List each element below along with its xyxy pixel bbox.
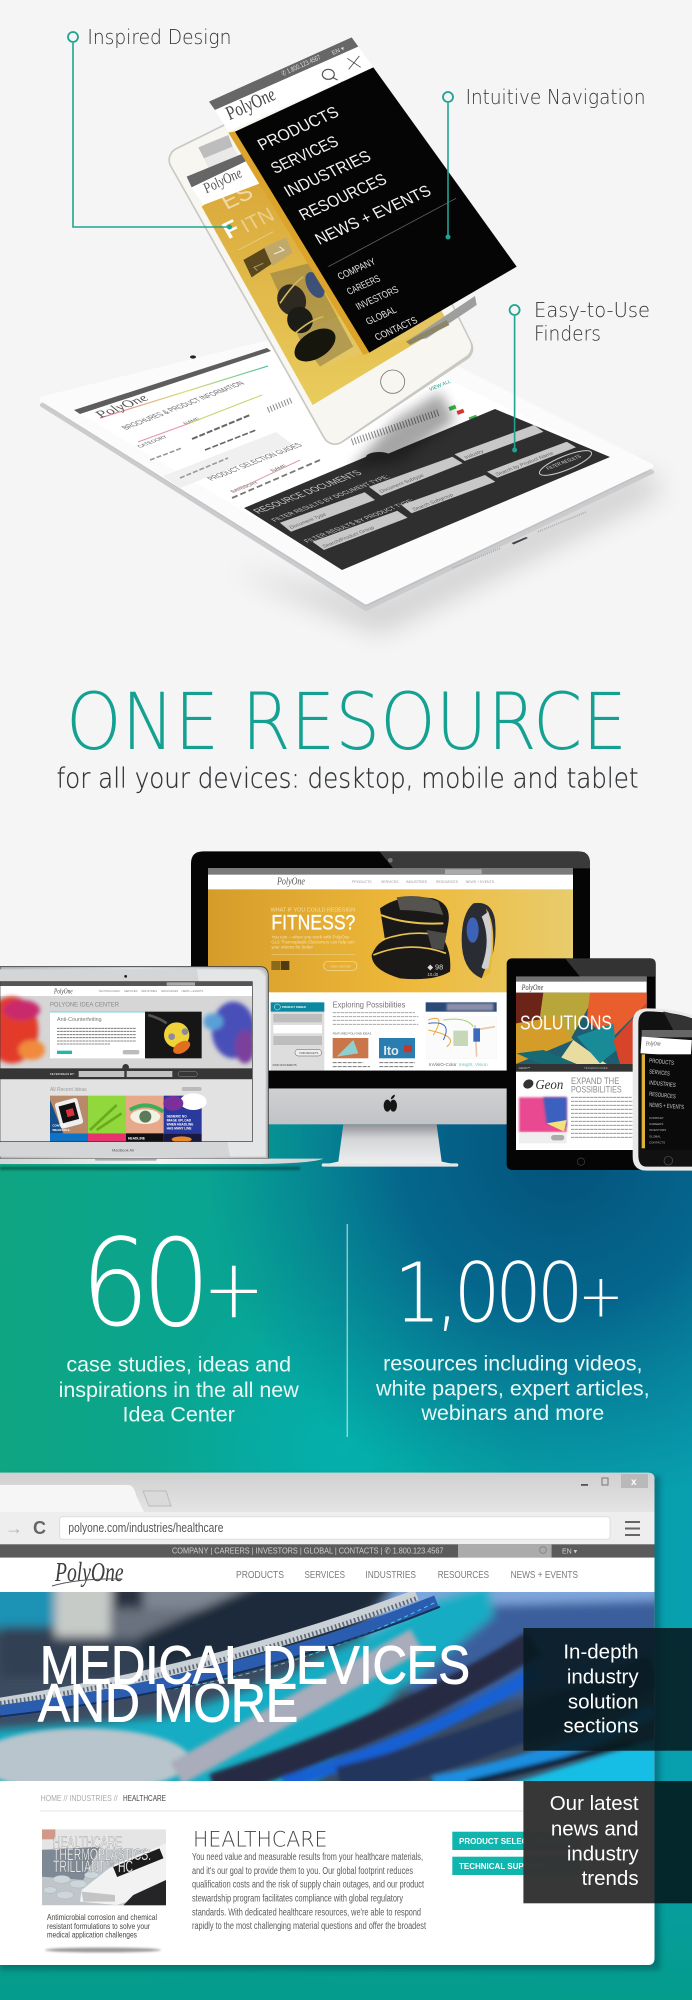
help buttons: PRODUCT SELECTION HELP [459, 1837, 571, 1846]
menu items [649, 1058, 684, 1111]
tablet page headings: BROCHURES & PRODUCT INFORMATION [119, 380, 247, 431]
filter results button: FILTER RESULTS [546, 454, 583, 471]
window controls [581, 1474, 648, 1488]
menu items: PRODUCTS [649, 1058, 674, 1067]
idea tiles: HAS MANY LINE [167, 1127, 192, 1131]
black menu [642, 1054, 692, 1150]
stand [322, 1124, 458, 1165]
screen nav [98, 990, 204, 992]
product image: wristband [462, 903, 496, 978]
callout: Intuitive Navigation [443, 85, 646, 240]
expand heading [571, 1076, 622, 1095]
help buttons: → [566, 1861, 576, 1872]
ghost letters: ES [216, 178, 257, 214]
tablet logo: PolyOne [90, 393, 154, 420]
panel headings: RESOURCE DOCUMENTS [251, 469, 365, 516]
browser tab [0, 1485, 144, 1512]
ideas hero [0, 996, 252, 1068]
expand heading: EXPAND THE [571, 1076, 619, 1086]
hero image [0, 1592, 654, 1781]
callout box: news and trends: trends [582, 1867, 639, 1890]
tablet page headings: NAME [183, 417, 203, 426]
secondary menu items: INVESTORS [354, 285, 401, 313]
blurred foreground [0, 1728, 190, 1792]
address bar [60, 1517, 610, 1539]
language switch: EN ▾ [331, 46, 346, 57]
site nav bar [0, 1558, 654, 1592]
top bar [642, 1030, 692, 1037]
dropdown labels [289, 449, 555, 549]
callout box: industry sections [523, 1628, 692, 1751]
menu items: SERVICES [649, 1069, 670, 1077]
idea tiles: HEADLINE [128, 1137, 146, 1141]
secondary menu items: COMPANY [336, 257, 378, 283]
reflection [565, 958, 656, 977]
site navigation [352, 880, 495, 884]
tablet shadow [230, 470, 665, 632]
exploring possibilities: Exploring Possibilities [333, 1000, 405, 1009]
stat text: resources: white papers, expert articles, [375, 1377, 650, 1401]
healthcare paragraph: standards. With dedicated healthcare resources, we're able to respond [192, 1907, 421, 1918]
stat text: resources [375, 1352, 650, 1425]
screen nav: INDUSTRIES [141, 989, 157, 993]
idea tiles [50, 1093, 207, 1142]
home button [664, 1156, 673, 1165]
tablet screen [74, 326, 610, 570]
dropdown labels: Search Subgroup [412, 493, 455, 512]
callout box: industry sections: In-depth [563, 1640, 639, 1663]
breadcrumb: HOME // INDUSTRIES // [41, 1793, 118, 1803]
screen nav: RESOURCES [161, 989, 178, 993]
product caption [47, 1912, 157, 1940]
product photo title [53, 1834, 151, 1876]
screen nav: TECHNOLOGIES [99, 989, 120, 993]
callout: Inspired Design [68, 25, 232, 230]
model label: MacBook Air [112, 1147, 135, 1152]
smartphone [633, 1008, 692, 1171]
reload icon: C [33, 1518, 46, 1538]
desktop computer [191, 851, 590, 1167]
tablet device: solutions page: TECHNOLOGIES [584, 1066, 608, 1070]
hero heading: MEDICAL DEVICES [40, 1635, 470, 1695]
nav items: SERVICES [304, 1570, 345, 1581]
small menu items: CONTACTS [649, 1140, 665, 1144]
help buttons: → [566, 1836, 576, 1847]
product photo title: HEALTHCARE [53, 1834, 122, 1852]
menu icon [625, 1521, 640, 1536]
banner body [271, 935, 355, 950]
dark filter bar [0, 1068, 252, 1079]
dropdown labels: Search by Product Name [495, 451, 555, 477]
card shadow [45, 1948, 161, 1952]
menu text [220, 46, 456, 343]
screen [516, 977, 647, 1150]
product image: wearable: ◆ 98 [427, 962, 443, 971]
site navigation: RESOURCES [436, 880, 459, 884]
lower ideas [0, 1079, 252, 1080]
site navigation: NEWS + EVENTS [466, 880, 495, 884]
callout: Easy-to-Use Finders: Finders [534, 322, 601, 346]
nav items: PRODUCTS [236, 1570, 284, 1581]
logo: PolyOne [521, 983, 544, 992]
nav items [236, 1570, 578, 1581]
hero heading [38, 1635, 470, 1734]
product image: wearable [372, 896, 450, 979]
tablet table rows [138, 395, 440, 498]
title: ONE RESOURCE [66, 678, 627, 768]
side ad [426, 1002, 497, 1012]
small menu items [649, 1116, 666, 1144]
stat text: resources: webinars and more [420, 1401, 604, 1425]
laptop screen: All Recent Ideas [50, 1087, 87, 1093]
tablet page headings: CATEGORY [230, 481, 261, 494]
page background [0, 0, 692, 1124]
idea tiles: WEARABLE [52, 1128, 70, 1132]
small menu items: COMPANY [649, 1116, 664, 1120]
healthcare paragraph [192, 1852, 426, 1932]
secondary menu items [336, 257, 420, 343]
ribbed tube [0, 1595, 440, 1717]
stat: 1,000+: 1,000 [394, 1247, 578, 1342]
banner heading: WHAT IF YOU COULD REDESIGN [271, 908, 355, 914]
phone ghost pages [198, 135, 233, 158]
stat: 1,000+: + [578, 1262, 623, 1331]
desktop computer: FIND RESULTS [299, 1051, 319, 1055]
desktop computer: VIEW CENTER [330, 964, 352, 968]
primary menu items: SERVICES [268, 133, 342, 177]
browser toolbar [0, 1512, 654, 1544]
tablet page headings: NAME [270, 464, 290, 473]
black lower bezel strip [208, 1071, 573, 1088]
idea center title: POLYONE IDEA CENTER [50, 1002, 119, 1009]
tablet camera [190, 355, 196, 359]
tablet status icons: VIEW ALL [429, 379, 452, 393]
gallery arrows [243, 248, 272, 278]
dropdown labels: Document Type [289, 512, 328, 530]
callout box: news and trends: Our latest [550, 1792, 639, 1815]
banner body: your visions for better [271, 945, 314, 950]
hero banner [208, 889, 573, 992]
finder panel [271, 1012, 324, 1071]
body [507, 958, 656, 1170]
apple logo mark [384, 1095, 397, 1112]
site navigation: PRODUCTS [352, 880, 372, 884]
screen [208, 868, 573, 1071]
tablet header band [74, 348, 271, 414]
featured image [148, 1015, 192, 1057]
search icon [322, 69, 338, 80]
phone screen content [216, 178, 448, 368]
site navigation: SERVICES [381, 880, 399, 884]
menu items: INDUSTRIES [649, 1080, 676, 1089]
healthcare paragraph: and it's our goal to provide them to you. Our global footprint reduces [192, 1866, 413, 1877]
geon logo: Geon [535, 1078, 563, 1093]
panel dropdowns [280, 425, 576, 550]
menu black panel [235, 67, 517, 353]
stat text: case studies: inspirations in the all new [59, 1378, 299, 1402]
healthcare paragraph: qualification costs and the risk of supply chain outages, and our product [192, 1880, 424, 1891]
chin [191, 1088, 590, 1124]
secondary menu items: CAREERS [345, 274, 383, 298]
small menu items: GLOBAL [649, 1134, 661, 1138]
phone number: ✆ 1.800.123.4567 [280, 53, 322, 78]
callout box: news and trends [523, 1781, 692, 1903]
tablet status icons [429, 379, 477, 421]
white band [641, 1037, 692, 1057]
expand heading: POSSIBILITIES [571, 1085, 622, 1095]
menu items: RESOURCES [649, 1092, 676, 1100]
product caption: medical application challenges [47, 1930, 137, 1940]
panel headings: FILTER RESULTS BY PRODUCT TYPE: [301, 498, 417, 544]
paint splash red [0, 997, 45, 1063]
healthcare paragraph: stewardship program facilitates compliance with global regulatory [192, 1894, 403, 1905]
banner buttons [271, 961, 280, 970]
stat text: resources: resources including videos, [383, 1352, 642, 1376]
phone screen [202, 140, 448, 405]
site utility bar [0, 1544, 654, 1558]
product image: wearable: 10.d0 [427, 972, 439, 977]
product photo title: TRILLIANT™ HC [53, 1858, 133, 1876]
tablet page headings [119, 380, 304, 494]
laptop base [0, 1159, 323, 1164]
idea tiles: CONTENT [52, 1124, 67, 1128]
healthcare paragraph: You need value and measurable results from your healthcare materials, [192, 1852, 423, 1863]
small menu items: INVESTORS [649, 1128, 666, 1132]
primary menu items: RESOURCES [296, 171, 390, 224]
phone home button [381, 370, 405, 393]
site logo: PolyOne [276, 876, 305, 888]
tablet device with finder page [42, 310, 665, 632]
help buttons: TECHNICAL SUPPORT [459, 1862, 546, 1871]
geon logo [522, 1078, 563, 1093]
tablet page headings: PRODUCT SELECTION GUIDES [205, 442, 304, 482]
dropdown labels: Industry [464, 449, 486, 460]
callout box: industry sections: solution [568, 1690, 639, 1713]
laptop computer [0, 967, 323, 1170]
browser window [0, 1473, 667, 1970]
browser shadow [0, 1476, 660, 1970]
phone shadow [350, 392, 455, 470]
paint splash blue [203, 1002, 255, 1063]
desktop computer: FITNESS? [271, 911, 355, 934]
bezel [191, 851, 590, 1088]
laptop screen [0, 982, 255, 1142]
idea tiles: WHEN HEADLINE [167, 1123, 193, 1127]
primary menu items: PRODUCTS [254, 103, 342, 154]
product image [270, 263, 353, 368]
solutions heading: SOLUTIONS [520, 1011, 612, 1034]
product caption: Antimicrobial corrosion and chemical [47, 1912, 157, 1922]
hero artwork [516, 993, 647, 1064]
secondary menu items: CONTACTS [373, 315, 420, 343]
window controls: x [631, 1477, 637, 1488]
close icon [347, 56, 361, 69]
idea tiles: IMAGE UPLOAD [167, 1119, 192, 1123]
tablet body [42, 314, 652, 609]
logo: PolyOne [645, 1040, 661, 1047]
help buttons [452, 1832, 580, 1875]
product caption: resistant formulations to solve your [47, 1921, 150, 1931]
menu white band [215, 47, 373, 132]
breadcrumb: HEALTHCARE [123, 1793, 166, 1803]
desktop computer: FIND DOCUMENTS [273, 1063, 297, 1067]
product photo [42, 1829, 166, 1905]
site navigation: INDUSTRIES [406, 880, 428, 884]
menu logo: PolyOne [220, 84, 280, 125]
phone screen content: ITN [237, 203, 278, 238]
callout box: news and trends: news and [551, 1818, 639, 1841]
primary menu items [254, 103, 434, 248]
stat text: case studies [59, 1353, 299, 1427]
utility links: COMPANY | CAREERS | INVESTORS | GLOBAL | CONTACTS | ✆ 1.800.123.4567 [172, 1546, 444, 1556]
lid [0, 967, 268, 1159]
callout: Easy-to-Use Finders: Easy-to-Use [534, 298, 650, 322]
stat: 60+: 60 [81, 1214, 203, 1353]
small menu items: CAREERS [649, 1122, 663, 1126]
dropdown labels: Search/Product Group [322, 525, 376, 549]
stat text: case studies: Idea Center [123, 1403, 235, 1427]
filter results button [537, 446, 594, 480]
screen nav: NEWS + EVENTS [182, 989, 204, 993]
primary menu items: INDUSTRIES [281, 148, 374, 201]
screen logo: PolyOne [53, 987, 73, 995]
browser frame [0, 1473, 654, 1965]
tablet gradient line [100, 366, 268, 418]
desktop computer: PRODUCT FINDER [282, 1005, 306, 1009]
dropdown labels: Document Subtype [379, 473, 426, 494]
featured product card [42, 1829, 166, 1952]
idea tiles: GENERIC NO [167, 1115, 187, 1119]
teal gradient background [0, 1124, 692, 2000]
forward arrow: → [5, 1518, 23, 1538]
healthcare heading: HEALTHCARE [193, 1828, 327, 1852]
desktop computer: Insight, Vision [459, 1062, 488, 1067]
tablet home port and speakers [452, 512, 587, 568]
callout box: industry sections: sections [563, 1715, 639, 1738]
banner body: GLS Thermoplastic Elastomers can help turn [271, 940, 355, 945]
browser window: EN ▾ [562, 1549, 578, 1556]
callout: Inspired Design: Inspired Design [87, 25, 231, 49]
bezel reflection [379, 851, 590, 868]
menu top bar [209, 37, 358, 110]
screen nav: SERVICES [124, 989, 138, 993]
url: polyone.com/industries/healthcare [68, 1520, 223, 1535]
hero word fragment: F [218, 215, 245, 245]
laptop screen: Anti-Counterfeiting [57, 1017, 102, 1023]
laptop screen: FILTER IDEAS BY: [50, 1072, 75, 1076]
callout box: news and trends: industry [567, 1843, 639, 1866]
tablet dark filter panel [244, 409, 610, 570]
rim [633, 1008, 692, 1171]
nav items: RESOURCES [438, 1570, 489, 1581]
idea thumbnails [333, 1038, 368, 1058]
nav items: INDUSTRIES [365, 1570, 416, 1581]
tablet device: solutions page: GEON™ [519, 1066, 530, 1070]
hero heading: AND MORE [38, 1674, 298, 1734]
healthcare paragraph: rapidly to the most challenging material questions and offer the broadest [192, 1921, 426, 1932]
desktop computer: FEATURED POLYONE IDEAS [333, 1032, 371, 1036]
tablet page headings: CATEGORY [137, 435, 170, 449]
under panels [407, 296, 477, 342]
home button [577, 1158, 585, 1165]
panel headings: FILTER RESULTS BY DOCUMENT TYPE: [269, 474, 392, 523]
stat text: case studies: case studies, ideas and [66, 1353, 291, 1377]
panel headings [251, 469, 417, 544]
phone with slide-out navigation [182, 37, 517, 432]
banner body: You can – when you work with PolyOne [271, 935, 350, 940]
stat: 60+: + [203, 1242, 265, 1337]
desktop computer: InVisiO-Color [429, 1062, 457, 1067]
primary menu items: NEWS + EVENTS [312, 182, 434, 248]
featured card [50, 1012, 145, 1058]
body text [571, 1097, 635, 1137]
callout: Intuitive Navigation: Intuitive Navigation [466, 85, 646, 109]
callout box: industry sections: industry [567, 1665, 639, 1688]
secondary menu items: GLOBAL [364, 305, 399, 328]
nav items: NEWS + EVENTS [511, 1570, 578, 1581]
phone body [182, 87, 460, 432]
desktop computer: Ito [383, 1044, 399, 1058]
phone logo: PolyOne [199, 165, 245, 197]
polyone logo: PolyOne [54, 1557, 124, 1587]
product photo title: THERMOPLASTICS: [53, 1846, 151, 1864]
tablet device: solutions page [507, 958, 656, 1170]
colour fan [519, 1097, 567, 1143]
menu gold strip [228, 131, 369, 355]
laptop shadow [0, 1167, 300, 1170]
callout: Easy-to-Use Finders [510, 298, 650, 452]
